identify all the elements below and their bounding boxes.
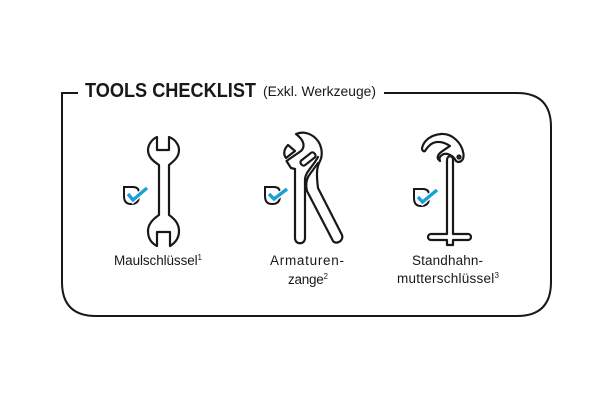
label: Armaturen- — [270, 253, 344, 268]
label: Maulschlüssel — [114, 253, 198, 268]
label: Standhahn- — [412, 253, 483, 268]
icon: checkmark badge — [414, 189, 437, 206]
label line 2: zange — [288, 272, 324, 287]
tool: water pump pliers — [265, 133, 344, 287]
icon: checkmark badge — [124, 187, 147, 204]
tool: open-end wrench — [114, 137, 203, 268]
subheading: (Exkl. Werkzeuge) — [263, 83, 376, 99]
label: 1 — [198, 253, 203, 262]
icon: stopcock key — [422, 134, 471, 245]
label line 2: 2 — [324, 272, 329, 281]
icon: wrench — [148, 137, 179, 246]
icon: pliers — [284, 133, 342, 243]
heading: TOOLS CHECKLIST — [85, 80, 256, 102]
label line 2: mutterschlüssel — [397, 271, 494, 286]
icon: checkmark badge — [265, 187, 287, 204]
tool: stopcock key — [397, 134, 500, 286]
label line 2: 3 — [495, 271, 500, 280]
panel: checklist frame — [62, 93, 551, 316]
